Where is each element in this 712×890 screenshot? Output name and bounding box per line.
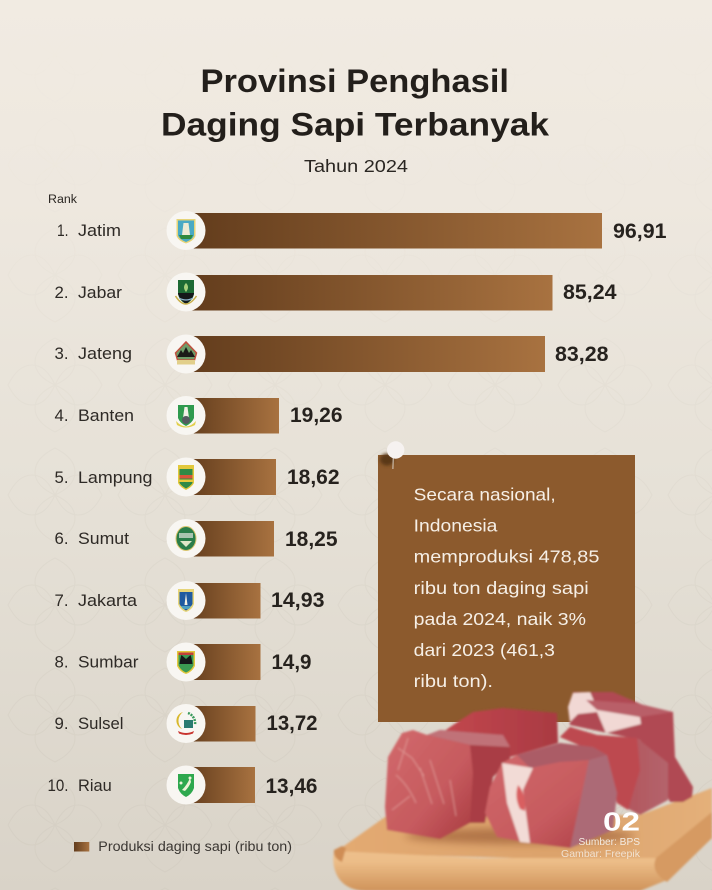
title: Daging Sapi Terbanyak xyxy=(161,106,549,142)
source text: Sumber: BPS xyxy=(578,836,640,848)
row: Banten xyxy=(54,396,343,435)
row: Jatim: 96,91 xyxy=(613,219,667,243)
icon: Sumut emblem xyxy=(176,526,196,550)
source text: Gambar: Freepik xyxy=(561,848,641,860)
row: Lampung: 5. xyxy=(54,469,68,487)
row: Jakarta xyxy=(54,581,325,620)
row: Lampung xyxy=(54,458,340,496)
row: Jateng xyxy=(54,334,609,374)
source text xyxy=(561,836,641,860)
row: Jabar: Jabar xyxy=(78,284,123,302)
icon: Sulsel emblem xyxy=(176,712,195,735)
row: Jabar: 85,24 xyxy=(563,280,617,304)
page number: 02 xyxy=(603,806,640,836)
row: Lampung: 18,62 xyxy=(287,465,340,489)
row: Jateng: 83,28 xyxy=(555,342,609,366)
row: Sumbar xyxy=(54,642,312,682)
callout xyxy=(378,455,635,722)
row: Sumut: 18,25 xyxy=(285,527,338,551)
icon: Jabar emblem xyxy=(176,280,196,304)
row: Banten: Banten xyxy=(78,407,134,425)
row: Jakarta: Jakarta xyxy=(78,592,138,610)
rank label: Rank xyxy=(48,194,77,206)
callout: ribu ton daging sapi xyxy=(414,578,589,598)
icon: Sumbar emblem xyxy=(177,651,195,674)
row: Banten: 4. xyxy=(54,407,68,425)
row: Riau: Riau xyxy=(78,777,112,795)
row: Sumut: Sumut xyxy=(78,530,129,548)
callout: Indonesia xyxy=(414,516,498,536)
row: Jabar: 2. xyxy=(54,284,68,302)
icon: Jakarta emblem xyxy=(178,589,194,612)
meat: front block xyxy=(485,743,617,848)
row: Riau xyxy=(48,766,318,804)
icon: Riau emblem xyxy=(178,774,194,797)
row: Riau: 10. xyxy=(48,777,68,795)
row: Sumbar: 14,9 xyxy=(272,650,312,674)
meat: back middle block xyxy=(443,708,558,757)
row: Riau: 13,46 xyxy=(266,774,318,798)
row: Jatim: 1. xyxy=(57,222,68,240)
row: Jateng: 3. xyxy=(54,345,68,363)
cutting board xyxy=(333,788,712,890)
row: Sumut xyxy=(54,519,338,558)
icon: Jateng emblem xyxy=(176,342,196,364)
icon: Lampung emblem xyxy=(178,465,194,490)
callout: memproduksi 478,85 xyxy=(414,547,599,567)
subtitle: Tahun 2024 xyxy=(304,156,408,176)
row: Sumbar: 8. xyxy=(54,654,68,672)
row: Sulsel: 9. xyxy=(54,715,68,733)
title xyxy=(161,63,549,142)
title: Provinsi Penghasil xyxy=(200,63,509,99)
row: Lampung: Lampung xyxy=(78,469,152,487)
row: Jatim: Jatim xyxy=(78,222,121,240)
row: Sumbar: Sumbar xyxy=(78,654,139,672)
row: Jabar xyxy=(54,272,617,312)
callout: Secara nasional, xyxy=(414,485,556,505)
legend: Produksi daging sapi (ribu ton) xyxy=(98,839,292,854)
row: Sulsel: Sulsel xyxy=(78,715,124,733)
meat: back right block xyxy=(560,692,693,815)
row: Jakarta: 7. xyxy=(54,592,68,610)
meat: left block xyxy=(385,730,510,839)
row: Sulsel: 13,72 xyxy=(266,711,318,735)
background xyxy=(0,306,712,890)
icon: pushpin xyxy=(380,441,404,469)
callout: dari 2023 (461,3 xyxy=(414,640,555,660)
row: Jakarta: 14,93 xyxy=(271,588,325,612)
row: Jatim xyxy=(57,211,667,250)
row: Sumut: 6. xyxy=(54,530,68,548)
callout: ribu ton). xyxy=(414,671,493,691)
row: Banten: 19,26 xyxy=(290,403,343,427)
callout: pada 2024, naik 3% xyxy=(414,609,586,629)
row: Jateng: Jateng xyxy=(78,345,132,363)
row: Sulsel xyxy=(54,704,318,743)
icon: Banten emblem xyxy=(176,405,196,428)
icon: Jatim emblem xyxy=(176,219,196,244)
image: beef on cutting board xyxy=(333,692,712,890)
